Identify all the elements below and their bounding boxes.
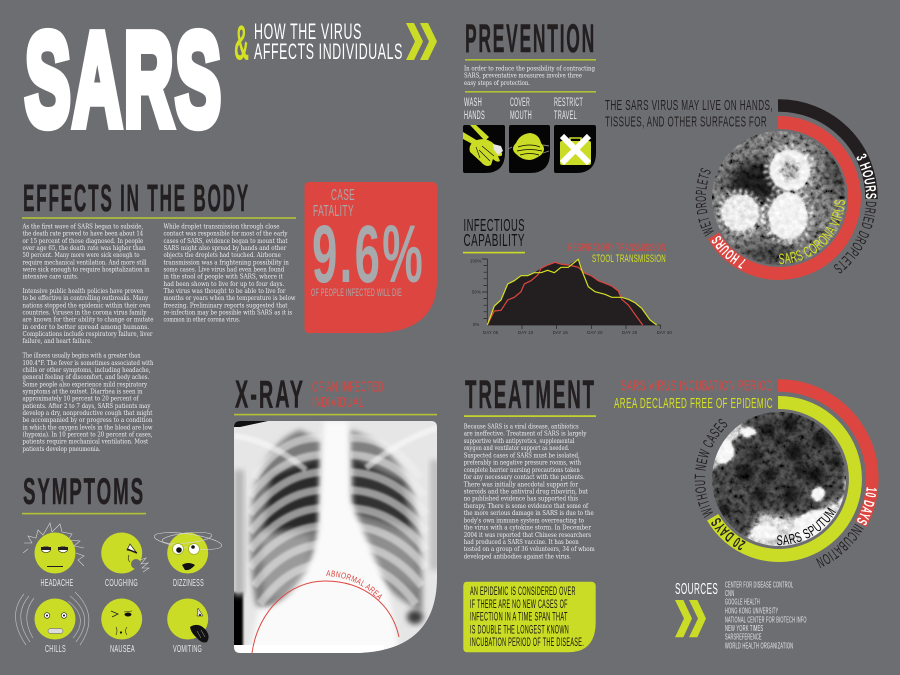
symptom: dizziness: DIZZINESS bbox=[173, 577, 204, 589]
subtitle: how the virus affects individuals: HOW THE VIRUS bbox=[254, 19, 362, 44]
lungs bbox=[250, 430, 422, 612]
symptom: chills: CHILLS bbox=[45, 643, 66, 655]
legend: transmission types bbox=[568, 242, 666, 265]
label: 7 hours: 7 HOURS bbox=[712, 236, 746, 269]
text: treatment body: preferably in negative pressure rooms, with bbox=[464, 460, 581, 467]
text: prevention intro: In order to reduce the possibility of contracting bbox=[464, 66, 595, 72]
text: treatment body: tested on a group of 36 volunteers, 34 of whom bbox=[464, 546, 595, 553]
photo: sars corona virus bbox=[708, 128, 850, 268]
text: effects column one: The illness usually begins with a greater than bbox=[22, 353, 141, 360]
callout: epidemic definition: AN EPIDEMIC IS CONSIDERED OVER bbox=[470, 584, 576, 598]
text: effects column two: transmission was a frightening possibility in bbox=[164, 259, 289, 266]
axis labels bbox=[470, 258, 672, 335]
text: effects column two: months or years when the temperature is below bbox=[164, 295, 296, 302]
text: sources list: CENTER FOR DISEASE CONTROL bbox=[725, 579, 793, 589]
text: effects column one: As the first wave of SARS began to subside, bbox=[22, 224, 143, 230]
text: effects column one: Some people also experience mild respiratory bbox=[22, 381, 148, 388]
text: case fatality label: FATALITY bbox=[313, 203, 354, 220]
text: TREATMENT bbox=[465, 373, 596, 417]
subheading: of an infected individual bbox=[312, 378, 384, 411]
text: effects column one: are known for their ability to change or mutate bbox=[22, 317, 154, 324]
text: sources list: CNN bbox=[725, 588, 734, 598]
panel: effects in the body bbox=[22, 178, 296, 453]
label: incubation: INCUBATION bbox=[816, 524, 864, 568]
axis labels: DAY 20 bbox=[587, 330, 603, 335]
text: effects column two: The virus was thought to be able to live for bbox=[164, 288, 286, 295]
text: effects column one: were sick enough to require hospitalization in bbox=[22, 266, 150, 274]
label: wet droplets: WET DROPLETS bbox=[696, 168, 714, 237]
title: SARS: SARS bbox=[25, 6, 223, 153]
text: effects column one: general feeling of discomfort, and body aches. bbox=[22, 374, 149, 381]
label: 10 days: 10 DAYS bbox=[857, 487, 877, 526]
heading: symptoms: SYMPTOMS bbox=[23, 471, 145, 512]
axis labels: DAY 25 bbox=[622, 330, 638, 335]
panel: sources bbox=[675, 579, 807, 650]
photo: sars sputum bbox=[712, 412, 846, 546]
step: restrict travel: RESTRICT bbox=[554, 97, 583, 109]
text: treatment body: Suspected cases of SARS must be isolated, bbox=[464, 452, 580, 459]
text: treatment body: steroids and the antiviral drug ribavirin, but bbox=[464, 488, 589, 496]
text: treatment body: supportive with antipyretics, supplemental bbox=[464, 438, 574, 445]
text: treatment body: There was initially anecdotal support for bbox=[464, 481, 578, 488]
label: 20 days: 20 DAYS bbox=[711, 518, 746, 550]
callout: epidemic definition: IS DOUBLE THE LONGEST KNOWN bbox=[470, 622, 569, 636]
text: effects column one: in order to better spread among humans. bbox=[22, 324, 149, 331]
step: wash hands bbox=[463, 97, 505, 173]
text: effects column two bbox=[164, 224, 296, 324]
text: effects column two: While droplet transmission through close bbox=[164, 224, 280, 230]
panel: x-ray bbox=[234, 374, 437, 654]
panel: symptoms bbox=[15, 471, 223, 655]
heading: incubation legend: SARS VIRUS INCUBATION PERIOD bbox=[621, 378, 773, 395]
collarbones bbox=[234, 428, 437, 470]
symptom: headache: HEADACHE bbox=[40, 577, 74, 589]
text: treatment body: body's own immune system overreacting to bbox=[464, 517, 584, 524]
text: effects column one: to be effective in controlling outbreaks. Many bbox=[22, 295, 149, 302]
spine and heart bbox=[250, 421, 400, 653]
heading: incubation legend: AREA DECLARED FREE OF EPIDEMIC bbox=[614, 395, 773, 412]
panel: infectious capability bbox=[463, 215, 672, 335]
text: effects column one: intensive care units. bbox=[22, 274, 79, 281]
text: sources list: GOOGLE HEALTH bbox=[725, 597, 760, 607]
annotation: abnormal area arc bbox=[252, 570, 400, 654]
symptom: coughing: COUGHING bbox=[105, 577, 138, 589]
text: effects column one: nations stopped the epidemic within their own bbox=[22, 302, 151, 309]
text: effects column two: contact was responsible for most of the early bbox=[164, 231, 288, 238]
text: treatment body: had produced a SARS vaccine. It has been bbox=[464, 539, 579, 546]
text: sources list bbox=[725, 579, 807, 650]
line: stool transmission bbox=[487, 259, 657, 325]
step: restrict travel bbox=[554, 97, 596, 173]
text: effects column two: had been shown to live for up to four days. bbox=[164, 281, 284, 288]
text: effects column one: Complications include respiratory failure, liver bbox=[22, 331, 153, 338]
callout: epidemic definition bbox=[463, 582, 596, 652]
heading: sources: SOURCES bbox=[675, 581, 718, 598]
subtitle: how the virus affects individuals: & bbox=[234, 16, 250, 70]
text: effects column two: cases of SARS, evidence began to mount that bbox=[164, 238, 288, 245]
step: cover mouth bbox=[508, 97, 550, 173]
symptom: nausea bbox=[101, 598, 142, 655]
axis labels: DAY 15 bbox=[553, 330, 568, 335]
text: treatment body: for any necessary contact with the patients. bbox=[464, 474, 585, 481]
chart: infectious capability area chart bbox=[470, 258, 672, 335]
text: effects column one: in which the oxygen levels in the blood are low bbox=[22, 424, 153, 431]
heading: infectious capability: INFECTIOUS bbox=[464, 215, 525, 235]
symptom: nausea: NAUSEA bbox=[110, 643, 135, 655]
chart: virus survival ring bbox=[696, 99, 878, 280]
text: NATIONAL CENTER FOR BIOTECH INFO bbox=[725, 614, 807, 624]
symptom: coughing bbox=[101, 532, 149, 589]
panel: case fatality: OF PEOPLE INFECTED WILL DIE bbox=[311, 287, 402, 299]
text: effects column one bbox=[22, 224, 154, 453]
text: effects column two: re-infection may be possible with SARS as it is bbox=[164, 310, 292, 317]
heading: incubation legend bbox=[614, 378, 773, 412]
step: cover mouth: COVER bbox=[510, 97, 530, 109]
label: sars corona virus: SARS CORONA VIRUS bbox=[779, 200, 845, 264]
text: effects column one: 100.4°F. The fever is sometimes associated with bbox=[22, 360, 154, 367]
text: treatment body bbox=[464, 424, 595, 560]
step: cover mouth: MOUTH bbox=[510, 110, 532, 122]
heading: virus lifespan on surfaces bbox=[605, 97, 773, 131]
text: effects column one: approximately 10 percent to 20 percent of bbox=[22, 396, 139, 403]
symptom: vomiting bbox=[167, 598, 209, 655]
symptom: headache bbox=[23, 523, 84, 589]
label: dried droplets: DRIED DROPLETS bbox=[834, 202, 876, 274]
text: effects column one: patients. After 2 to 7 days, SARS patients may bbox=[22, 403, 151, 410]
text: treatment body: no published evidence has supported this bbox=[464, 496, 578, 503]
axis labels: DAY 30 bbox=[657, 330, 672, 335]
heading: infectious capability: CAPABILITY bbox=[464, 230, 525, 250]
step: wash hands: WASH bbox=[464, 97, 482, 109]
text: effects column one: Intensive public health policies have proven bbox=[22, 288, 144, 295]
axis labels: DAY 10 bbox=[518, 330, 534, 335]
text: effects column one: be accompanied by or progress to a condition bbox=[22, 417, 153, 424]
label: 3 hours: 3 HOURS bbox=[856, 154, 876, 199]
text: sources list: WORLD HEALTH ORGANIZATION bbox=[725, 640, 793, 650]
text: treatment body: 2004 it was reported that Chinese researchers bbox=[464, 532, 591, 539]
text: effects column two: some cases. Live virus had even been found bbox=[164, 266, 284, 274]
text: effects column one: patients develop pneumonia. bbox=[22, 446, 101, 453]
axis labels: 100% bbox=[470, 258, 482, 264]
subheading: of an infected individual: OF AN INFECTED bbox=[312, 378, 384, 396]
panel: prevention bbox=[463, 17, 596, 173]
text: treatment body: are ineffective. Treatment of SARS is largely bbox=[464, 431, 587, 438]
subtitle: how the virus affects individuals bbox=[234, 16, 403, 70]
icon: title chevrons bbox=[406, 23, 437, 60]
label: without new cases: WITHOUT NEW CASES bbox=[694, 418, 728, 518]
text: treatment body: developed antibodies against the virus. bbox=[464, 553, 571, 560]
panel: treatment bbox=[464, 373, 596, 560]
text: treatment body: oxygen and ventilator support as needed. bbox=[464, 445, 569, 452]
text: effects column one: (hypoxia). In 10 percent to 20 percent of cases, bbox=[22, 432, 153, 438]
heading: x-ray: X-RAY bbox=[235, 374, 305, 416]
text: effects column one: chills or other symptoms, including headache, bbox=[22, 367, 151, 374]
subtitle: how the virus affects individuals: AFFECTS INDIVIDUALS bbox=[254, 39, 403, 64]
text: sources list: SARSREFERENCE bbox=[725, 632, 762, 642]
subheading: of an infected individual: INDIVIDUAL bbox=[312, 394, 364, 411]
text: effects column one: countries. Viruses in the corona virus family bbox=[22, 310, 147, 317]
icon: sources chevrons bbox=[675, 600, 706, 637]
legend: transmission types: STOOL TRANSMISSION bbox=[592, 253, 666, 265]
text: treatment body: Because SARS is a viral disease, antibiotics bbox=[464, 424, 579, 430]
text: effects column two: objects the droplets had touched. Airborne bbox=[164, 252, 281, 259]
ring: 10 days incubation bbox=[778, 385, 872, 524]
heading: infectious capability bbox=[464, 215, 525, 250]
text: effects column one: 50 percent. Many more were sick enough to bbox=[22, 252, 140, 259]
text: prevention intro: SARS, preventative measures involve three bbox=[464, 73, 582, 80]
callout: epidemic definition: IF THERE ARE NO NEW CASES OF bbox=[470, 597, 568, 611]
text: effects column one: or 15 percent of those diagnosed. In people bbox=[22, 238, 144, 245]
text: treatment body: complete barrier nursing precautions taken bbox=[464, 467, 580, 474]
ring: 3 hours dried droplets bbox=[778, 105, 872, 199]
text: effects column two: freezing. Preliminary reports suggested that bbox=[164, 302, 288, 309]
axis labels: 0% bbox=[473, 322, 480, 327]
text: case fatality label bbox=[313, 187, 355, 220]
legend: transmission types: RESPIRATORY TRANSMISSION bbox=[568, 242, 666, 254]
text: case fatality label: CASE bbox=[331, 187, 355, 204]
text: treatment body: therapy. There is some evidence that some of bbox=[464, 503, 589, 510]
text: effects column one: require mechanical ventilation. And more still bbox=[22, 259, 147, 266]
symptom: vomiting: VOMITING bbox=[173, 643, 202, 655]
step: wash hands: HANDS bbox=[464, 110, 485, 122]
text: effects column one: failure, and heart failure. bbox=[22, 338, 92, 345]
text: effects column two: SARS might also spread by hands and other bbox=[164, 245, 286, 252]
ribs bbox=[250, 438, 426, 604]
text: effects column one: over age 65, the death rate was higher than bbox=[22, 245, 146, 252]
text: prevention intro: easy steps of protection. bbox=[464, 80, 530, 87]
callout: epidemic definition: INFECTION IN A TIME SPAN THAT bbox=[470, 610, 568, 624]
ring: 20 days without new cases bbox=[713, 402, 855, 555]
text: effects column two: common in other corona virus. bbox=[164, 317, 240, 324]
stat: 9.6%: 9.6% bbox=[312, 209, 425, 300]
callout: epidemic definition: INCUBATION PERIOD OF THE DISEASE. bbox=[470, 635, 584, 649]
panel: effects in the body: EFFECTS IN THE BODY bbox=[23, 178, 250, 220]
text: effects column one: patients require mechanical ventilation. Most bbox=[22, 439, 149, 446]
axis labels: 50% bbox=[472, 290, 481, 294]
text: effects column one: develop a dry, nonproductive cough that might bbox=[22, 410, 153, 417]
image: chest x-ray bbox=[226, 421, 440, 662]
axis labels: DAY 05 bbox=[483, 330, 499, 335]
text: prevention intro bbox=[464, 66, 595, 87]
step: restrict travel: TRAVEL bbox=[554, 110, 577, 122]
text: sources list: NEW YORK TIMES bbox=[725, 623, 763, 633]
label: sars sputum: SARS SPUTUM bbox=[777, 507, 836, 546]
text: effects column one: the death rate proved to have been about 14 bbox=[22, 231, 143, 238]
symptom: dizziness bbox=[153, 529, 223, 589]
text: effects column two: in the stool of people with SARS, where it bbox=[164, 274, 283, 281]
text: effects column one: symptoms at the outset. Diarrhea is seen in bbox=[22, 388, 143, 396]
text: sources list: HONG KONG UNIVERSITY bbox=[725, 605, 778, 615]
line: respiratory transmission bbox=[487, 262, 643, 325]
panel: case fatality bbox=[304, 182, 437, 333]
ring: 7 hours wet droplets bbox=[714, 122, 854, 273]
text: PREVENTION bbox=[465, 17, 596, 61]
symptom: chills bbox=[15, 592, 89, 655]
text: treatment body: the more serious damage in SARS is due to the bbox=[464, 510, 594, 517]
annotation: abnormal area arc: ABNORMAL AREA bbox=[326, 570, 382, 600]
text: treatment body: the virus with a cytokine storm. In December bbox=[464, 525, 591, 532]
chart: incubation ring bbox=[694, 379, 879, 568]
